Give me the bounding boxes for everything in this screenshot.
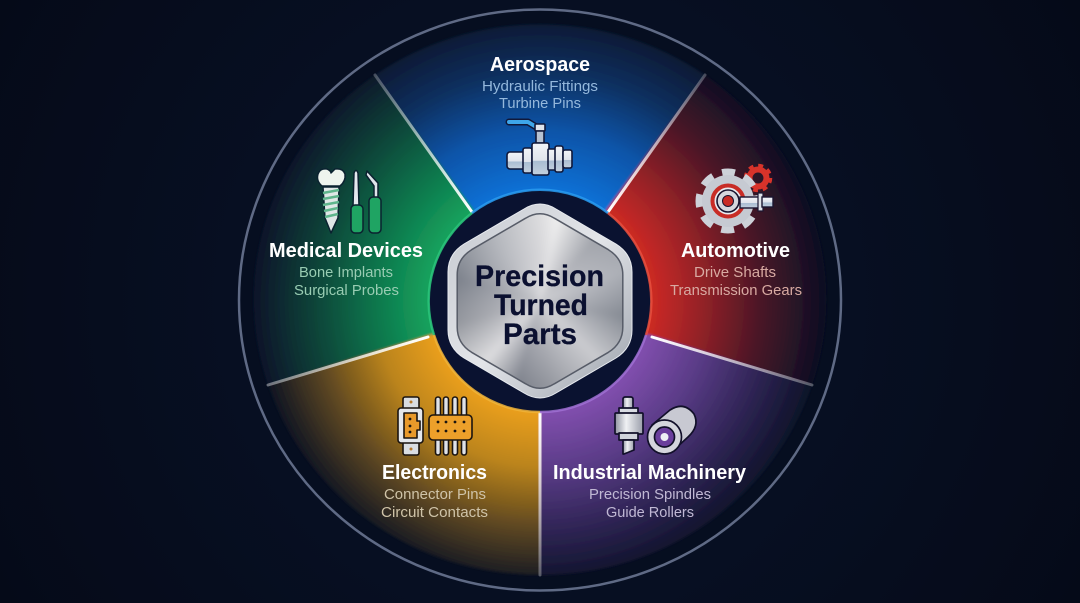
segment: automotive bbox=[540, 75, 826, 385]
label: aerospace bbox=[482, 54, 598, 112]
segment: industrial machinery bbox=[540, 301, 812, 575]
segment: electronics bbox=[268, 301, 540, 575]
label: electronics: Circuit Contacts bbox=[381, 505, 488, 521]
label: automotive: Drive Shafts bbox=[694, 265, 776, 281]
label: aerospace: Turbine Pins bbox=[499, 96, 581, 112]
label: industrial machinery: Precision Spindles bbox=[589, 487, 711, 503]
label: medical devices: Bone Implants bbox=[299, 265, 393, 281]
icon: gears and drive shaft bbox=[700, 166, 773, 229]
icon: implant and surgical probes bbox=[318, 169, 381, 233]
small red gear bbox=[746, 166, 770, 190]
label: electronics: Electronics bbox=[382, 462, 487, 484]
label: automotive: Transmission Gears bbox=[670, 283, 802, 299]
icon: valve bbox=[507, 122, 572, 175]
segment: medical devices bbox=[254, 75, 540, 385]
spokes bbox=[268, 75, 812, 575]
label: automotive: Automotive bbox=[681, 240, 790, 262]
label: industrial machinery bbox=[553, 462, 747, 521]
center title bbox=[475, 260, 604, 351]
label: electronics bbox=[381, 462, 488, 521]
center title: Turned bbox=[494, 289, 588, 322]
label: medical devices: Surgical Probes bbox=[294, 283, 399, 299]
label: automotive bbox=[670, 240, 802, 299]
label: industrial machinery: Guide Rollers bbox=[606, 505, 694, 521]
label: industrial machinery: Industrial Machinery bbox=[553, 462, 747, 484]
label: medical devices: Medical Devices bbox=[269, 240, 423, 262]
central metal hexagon badge bbox=[448, 204, 632, 398]
wheel segments bbox=[254, 24, 826, 575]
icon: connector and pin block bbox=[398, 397, 472, 455]
label: electronics: Connector Pins bbox=[384, 487, 486, 503]
icon: spindle and guide roller bbox=[615, 397, 696, 454]
central hub disc bbox=[429, 190, 651, 412]
label: aerospace: Aerospace bbox=[490, 54, 590, 76]
label: aerospace: Hydraulic Fittings bbox=[482, 79, 598, 95]
segment: aerospace bbox=[375, 24, 705, 301]
center title: Parts bbox=[503, 318, 577, 351]
label: medical devices bbox=[269, 240, 423, 299]
center title: Precision bbox=[475, 260, 604, 293]
outer ring bbox=[239, 10, 841, 590]
